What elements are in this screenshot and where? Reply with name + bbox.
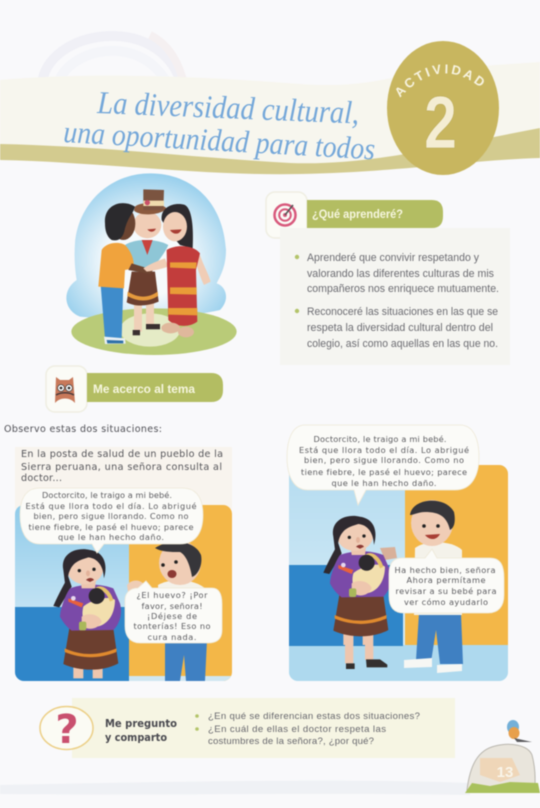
speech bubble: doctor: tonterías! Eso no [134, 621, 210, 631]
heading: Me pregunto [105, 717, 177, 730]
child with hat [125, 189, 168, 335]
heading: y comparto [105, 731, 167, 744]
speech bubble: mother: tiene fiebre, le pasé el huevo; parece [301, 467, 467, 477]
illustration: three children holding hands [66, 173, 237, 355]
speech bubble: doctor: favor, señora! [142, 601, 202, 611]
title: una oportunidad para todos [63, 114, 376, 166]
speech bubble: mother: Doctorcito, le traigo a mi bebé. [42, 490, 172, 500]
speech bubble: mother [20, 488, 203, 553]
heading: Me acerco al tema: Me acerco al tema [93, 382, 195, 396]
title: La diversidad cultural, [96, 84, 360, 131]
doctor [127, 541, 212, 681]
questions: ¿En cuál de ellas el doctor respeta las [208, 724, 386, 735]
speech bubble: mother: que le han hecho daño. [332, 478, 436, 488]
title [63, 84, 376, 166]
icon: question mark [40, 706, 93, 753]
child in red dress [143, 204, 211, 337]
caption panel: Sierra peruana, una señora consulta al [21, 462, 222, 473]
woman with baby [53, 549, 121, 678]
heading: ¿Qué aprenderé? [307, 200, 443, 228]
panel: learning goals [280, 228, 510, 365]
panel: second situation [287, 425, 508, 681]
speech bubble: doctor [125, 581, 222, 643]
panel: first situation [15, 447, 232, 681]
icon: target [266, 192, 307, 238]
comic scene [15, 505, 232, 681]
speech bubble: mother: Está que llora todo el día. Lo abrigué [299, 445, 469, 455]
panel: learning goals: respeta la diversidad cultural dentro del [307, 322, 493, 334]
questions: costumbres de la señora?, ¿por qué? [208, 736, 374, 747]
doctor [380, 500, 463, 673]
speech bubble: doctor [389, 549, 504, 613]
page number: 13 [497, 764, 513, 781]
intro text: Observo estas dos situaciones: [4, 424, 162, 435]
caption panel: doctor... [21, 473, 62, 484]
woman with baby [323, 516, 391, 669]
heading [105, 717, 177, 744]
questions: ¿En qué se diferencian estas dos situaciones? [208, 711, 420, 722]
heading: Me acerco al tema [87, 373, 223, 402]
icon: bird [507, 720, 532, 742]
panel: learning goals: Aprenderé que convivir respetando y [307, 252, 479, 264]
title banner [0, 62, 540, 174]
panel: learning goals: compañeros nos enriquece mutuamente. [307, 283, 499, 295]
caption panel: En la posta de salud de un pueblo de la [21, 449, 223, 460]
speech bubble: doctor: ¿El huevo? ¡Por [136, 590, 208, 600]
speech bubble: mother [287, 425, 479, 505]
speech bubble: doctor: ¡Déjese de [147, 611, 197, 621]
decorative faint rainbow [42, 35, 184, 85]
speech bubble: doctor: revisar a su bebé para [396, 586, 496, 596]
activity number: 2 [424, 81, 457, 164]
decorative bottom scan line [0, 781, 470, 795]
speech bubble: doctor: Ha hecho bien, señora [394, 565, 496, 575]
speech bubble: doctor: Ahora permítame [406, 575, 486, 585]
speech bubble: mother: que le han hecho daño. [58, 532, 164, 542]
panel: learning goals: colegio, así como aquellas en las que no. [307, 338, 498, 350]
speech bubble: doctor: cura nada. [148, 632, 196, 642]
page number graphic [465, 720, 540, 793]
icon: question mark: ? [55, 707, 79, 753]
speech bubble: mother: Está que llora todo el día. Lo abrigué [26, 501, 196, 511]
questions [195, 711, 420, 747]
panel: learning goals: Reconoceré las situaciones en las que se [307, 306, 498, 318]
child in orange shirt [98, 203, 153, 344]
speech bubble: mother: tiene fiebre, le pasé el huevo; parece [28, 522, 194, 532]
comic scene [289, 465, 508, 681]
panel: Me pregunto y comparto [40, 698, 455, 758]
activity label: ACTIVIDAD [396, 64, 484, 98]
icon: owl [46, 366, 87, 412]
speech bubble: mother: Doctorcito, le traigo a mi bebé. [314, 434, 446, 444]
activity badge [386, 40, 500, 176]
speech bubble: mother: bien, pero sigue llorando. Como no [304, 455, 464, 465]
speech bubble: mother: bien, pero sigue llorando. Como no [34, 511, 188, 521]
caption panel [15, 447, 232, 509]
speech bubble: doctor: ver cómo ayudarlo [404, 597, 488, 607]
panel: learning goals: valorando las diferentes culturas de mis [307, 268, 494, 280]
heading: ¿Qué aprenderé?: ¿Qué aprenderé? [312, 207, 403, 221]
